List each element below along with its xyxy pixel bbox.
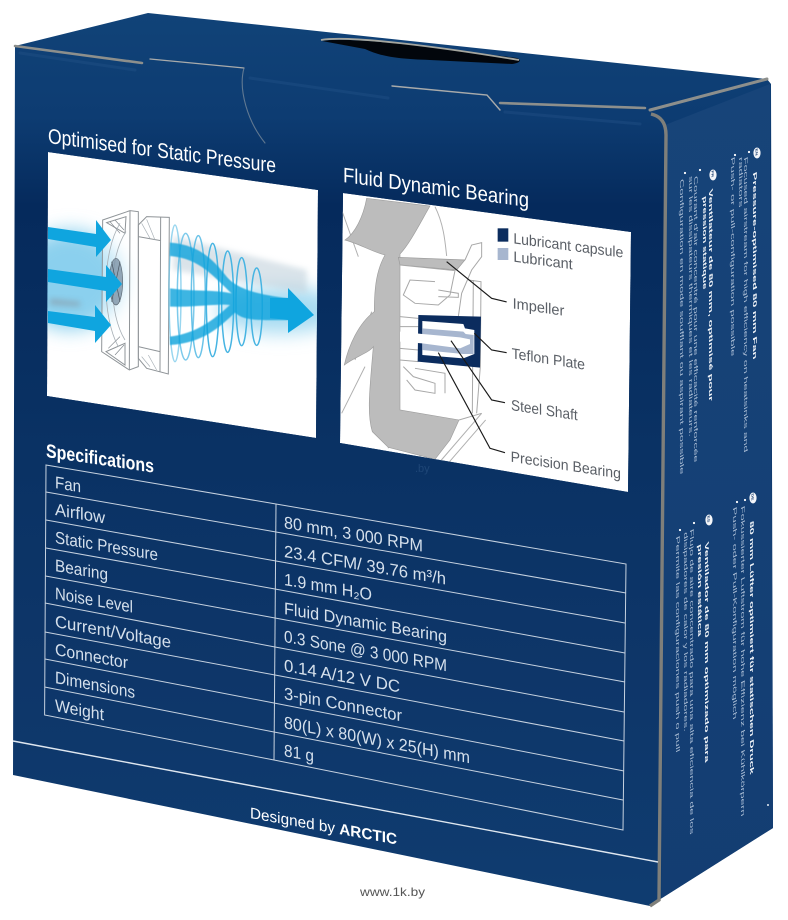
leader lines [438,262,507,453]
spec values [284,513,470,767]
spec labels: Dimensions [55,667,135,702]
panel: fluid dynamic bearing diagram [340,193,631,492]
spec labels: Bearing [55,556,108,584]
side text: French: FR [711,170,714,178]
arrow: inflow middle [48,265,122,302]
housing line work [400,243,482,420]
arrow: inflow bottom [48,305,111,343]
arrows [48,220,314,343]
side text: German: 80 mm Lüfter optimiert für statischen Druck [749,519,755,776]
footer divider line [13,741,658,862]
side text: Spanish [675,514,713,836]
spec labels: Noise Level [55,584,133,617]
spec labels: Weight [55,695,104,724]
arrow: inflow top [48,220,111,257]
steel shaft [400,332,470,348]
heading: optimised for static pressure: Optimised for Static Pressure [48,125,276,178]
spec values: 80(L) x 80(W) x 25(H) mm [284,712,470,767]
table grid [45,465,626,830]
specifications table [45,465,626,830]
side text: French: Ventilateur de 80 mm, optimisé pour [708,187,714,404]
lubricant [422,328,474,354]
spec values: 81 g [284,740,314,766]
spec labels: Fan [55,473,81,496]
top flap details [15,46,767,143]
spec labels: Current/Voltage [55,612,171,652]
fold edge [650,114,666,906]
side text: English: Push- or pull-configuration possible [730,155,736,358]
spec values: 0.3 Sone @ 3 000 RPM [284,627,447,675]
side text: French: pression statique [702,194,708,291]
side text: Spanish: disipadores de calor y los radiadores. [683,530,689,733]
side text: English: radiators [738,155,744,209]
side text: Spanish: Ventilador de 80 mm optimizado para [704,540,710,764]
footer: designed by arctic: Designed by ARCTIC [250,805,397,848]
impeller top bar [398,257,465,270]
side text: French: Courant d'air concentré pour une efficacité renforcée [693,174,699,464]
spec values: 23.4 CFM/ 39.76 m³/h [284,542,446,589]
side text: English [730,148,761,454]
converging airflow streams [170,243,288,345]
legend: lubricant: Lubricant [513,249,573,273]
heading: specifications: Specifications [46,441,154,478]
side text: French: sur les dissipateurs thermiques et les radiateurs. [688,174,694,438]
side text: French: Configuration en mode soufflant ou aspirant possible [679,177,685,476]
side text: Spanish: ES [707,515,710,523]
spec labels [55,473,171,724]
legend: lubricant [498,248,573,270]
side text: Spanish: Flujo de aire concentrado para una alta eficiencia de los [689,527,695,836]
label: precision bearing: Precision Bearing [511,449,621,483]
airflow glow [17,230,343,333]
legend: lubricant capsule [498,228,623,258]
spec values: Fluid Dynamic Bearing [284,599,447,646]
spec values: 3-pin Connector [284,683,402,725]
label: teflon plate: Teflon Plate [512,345,585,374]
arrow: outflow [270,288,314,333]
side text: German: Fokussierter Luftstrom für hohe Effizienz bei Kühlkörpern [740,504,746,818]
spec values: 80 mm, 3 000 RPM [284,513,423,556]
side text: Spanish: presión estática [697,542,703,638]
spec labels: Airflow [55,500,106,528]
fan blade silhouette [344,198,459,459]
side text: English: Focused airstream for high efficiency on heatsinks and [743,155,749,454]
side text: French [679,169,717,476]
fan outline [102,211,169,374]
spec values: 1.9 mm H₂O [284,570,372,604]
side face [650,84,773,906]
spec values: 0.14 A/12 V DC [284,655,400,696]
side text: German: Push- oder Pull-Konfiguration möglich [732,505,738,721]
air rings [169,225,262,362]
side text: English: EN [755,148,758,156]
side text: German: DE [751,493,754,501]
spec labels: Static Pressure [55,528,158,564]
spec labels: Connector [55,639,128,673]
side text: Spanish: Permite las configuraciones push o pull [675,534,681,754]
top cut-out hole [321,39,520,64]
watermark on box: .by [415,463,430,475]
lubricant capsule [418,315,481,368]
thin blade outlines [342,200,486,465]
heading: fluid dynamic bearing: Fluid Dynamic Bearing [343,164,529,212]
side text: German [732,492,757,818]
panel: static pressure airflow illustration [47,152,318,438]
watermark: www.1k.by: www.1k.by [359,885,425,899]
label: impeller: Impeller [513,295,564,320]
legend: lubricant capsule: Lubricant capsule [513,230,623,262]
side text: English: Pressure-optimised 80 mm Fan [752,170,758,361]
label: steel shaft: Steel Shaft [511,397,578,424]
